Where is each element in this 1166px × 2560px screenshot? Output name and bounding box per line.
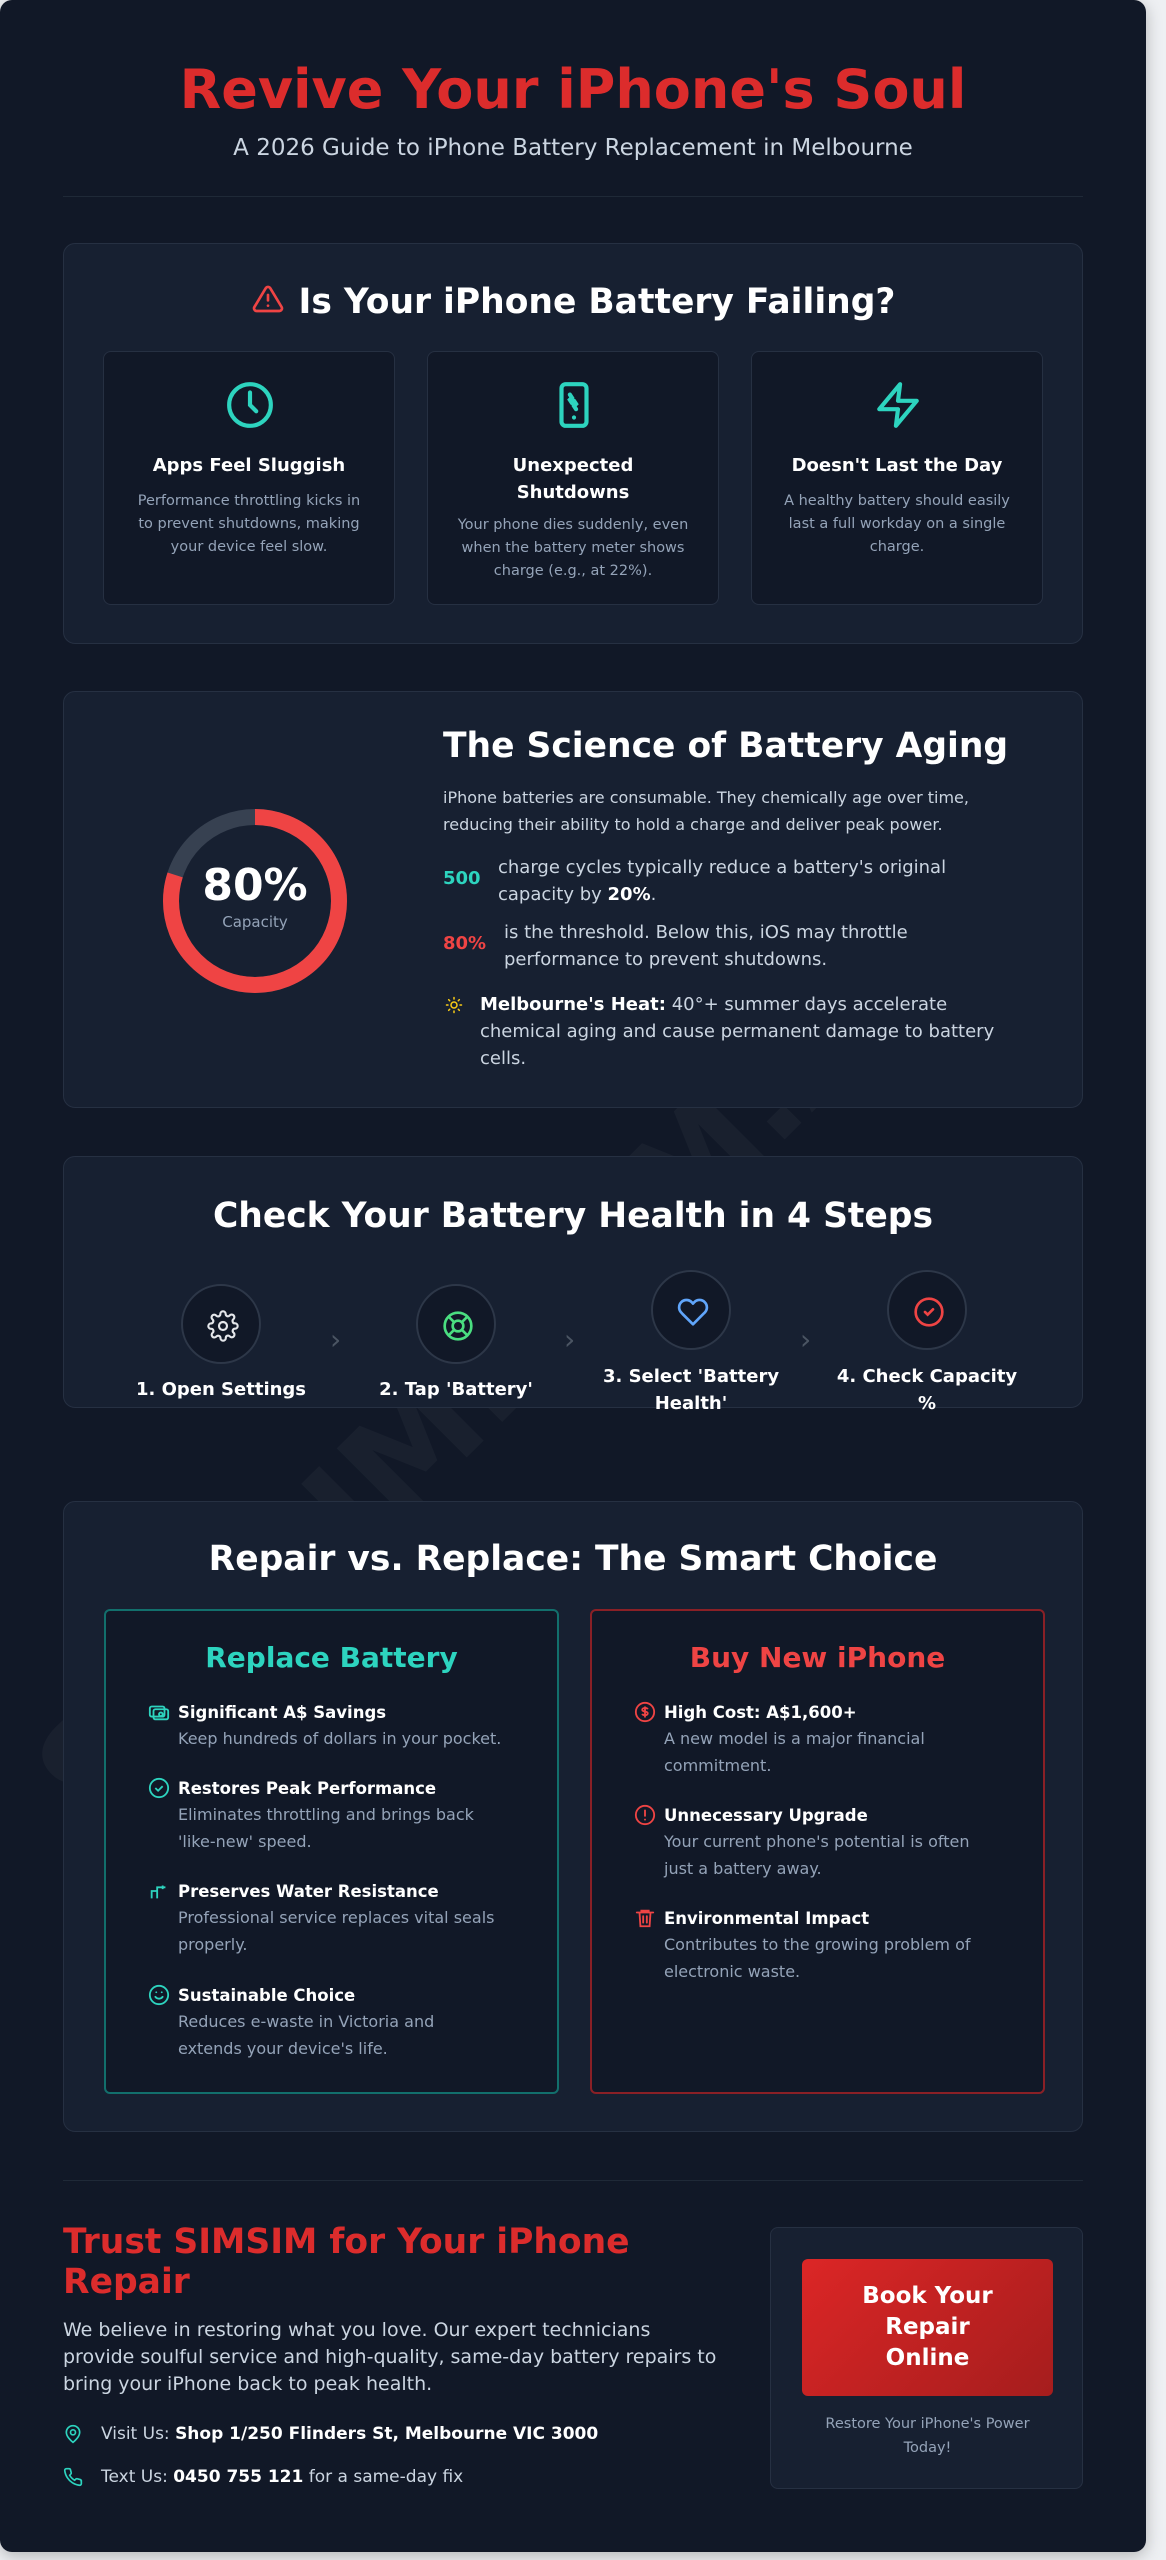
heading: steps: Check Your Battery Health in 4 Steps (213, 1196, 933, 1236)
item: upgrade: Your current phone's potential is often just a battery away. (664, 1832, 969, 1878)
ring chart: Capacity (222, 913, 288, 931)
panel: failing signs (63, 243, 1083, 644)
stat: 80%: 80% (443, 933, 486, 954)
text: trust: bring your iPhone back to peak health. (63, 2373, 432, 2395)
stat: 500: 500 (443, 868, 481, 889)
icon: sun (446, 996, 462, 1014)
heading: science: The Science of Battery Aging (443, 726, 1008, 766)
arrow: › (330, 1323, 341, 1356)
button: book: Repair (885, 2314, 970, 2340)
item: water: Professional service replaces vital seals properly. (178, 1908, 494, 1954)
heading: trust: Trust SIMSIM for Your iPhone Repair (63, 2222, 630, 2302)
item: performance (148, 1778, 474, 1851)
card: sluggish: Performance throttling kicks in to prevent shutdowns, making your device feel slow. (138, 493, 360, 555)
card: sluggish: Apps Feel Sluggish (153, 455, 345, 476)
item: water: Preserves Water Resistance (178, 1882, 439, 1901)
icon: phone (559, 382, 589, 428)
item: savings: Keep hundreds of dollars in your pocket. (178, 1729, 501, 1748)
box: replace battery: Replace Battery (205, 1641, 458, 1674)
card: shutdowns (427, 351, 719, 605)
heat note: Melbourne's Heat: 40°+ summer days accelerate chemical aging and cause permanent damage to battery cells. (480, 994, 994, 1069)
card: shutdowns: Shutdowns (517, 482, 629, 503)
card: day: Doesn't Last the Day (792, 455, 1002, 476)
section: trust (63, 2222, 716, 2487)
item: cost: A new model is a major financial commitment. (664, 1729, 925, 1775)
heading: failing: Is Your iPhone Battery Failing? (299, 282, 895, 322)
item: environment (636, 1909, 971, 1981)
text: trust (63, 2319, 716, 2395)
stat: 80%: is the threshold. Below this, iOS may throttle performance to prevent shutdowns. (504, 922, 908, 970)
text: trust: We believe in restoring what you love. Our expert technicians (63, 2319, 650, 2341)
item: environment: Contributes to the growing problem of electronic waste. (664, 1935, 971, 1981)
button: book: Online (886, 2345, 969, 2371)
step 4 (837, 1270, 1017, 1414)
item: upgrade (634, 1804, 969, 1878)
step 4: 4. Check Capacity (837, 1366, 1017, 1387)
title: Revive Your iPhone's Soul (180, 58, 966, 121)
box: buy new: Buy New iPhone (690, 1641, 945, 1674)
box: replace battery (104, 1609, 559, 2094)
card: shutdowns: Unexpected (513, 455, 633, 476)
card: day (751, 351, 1043, 605)
card: sluggish (103, 351, 395, 605)
box: buy new (590, 1609, 1045, 2094)
item: water (150, 1882, 494, 1954)
step 3: 3. Select 'Battery (603, 1366, 779, 1387)
item: performance: Eliminates throttling and brings back 'like-new' speed. (178, 1805, 474, 1851)
text: trust: provide soulful service and high-quality, same-day battery repairs to (63, 2346, 716, 2368)
card: day: A healthy battery should easily last a full workday on a single charge. (784, 493, 1010, 555)
arrow: › (800, 1323, 811, 1356)
ring chart (163, 809, 347, 993)
icon: clock (227, 382, 273, 428)
item: sustainable: Reduces e-waste in Victoria and extends your device's life. (178, 2012, 434, 2058)
item: sustainable: Sustainable Choice (178, 1986, 355, 2005)
text: intro: iPhone batteries are consumable. They chemically age over time, reducing their ability to hold a charge and deliver peak power. (443, 788, 969, 834)
CTA box (770, 2227, 1083, 2489)
item: savings (148, 1703, 501, 1748)
stat: 500: charge cycles typically reduce a battery's original capacity by 20%. (498, 857, 946, 905)
arrow: › (564, 1323, 575, 1356)
item: savings: Significant A$ Savings (178, 1703, 386, 1722)
subtitle: A 2026 Guide to iPhone Battery Replacement in Melbourne (233, 135, 913, 161)
item: sustainable (148, 1984, 434, 2058)
step 2 (379, 1284, 533, 1400)
panel: steps (63, 1156, 1083, 1408)
contact: address: Visit Us: Shop 1/250 Flinders St, Melbourne VIC 3000 (101, 2424, 598, 2444)
contact: phone: Text Us: 0450 755 121 for a same-day fix (101, 2467, 463, 2487)
panel: repair vs replace (63, 1501, 1083, 2132)
step 1: 1. Open Settings (136, 1379, 306, 1400)
item: upgrade: Unnecessary Upgrade (664, 1806, 868, 1825)
text: cta: Restore Your iPhone's Power Today! (825, 2416, 1030, 2456)
item: cost (634, 1702, 925, 1775)
card: shutdowns: Your phone dies suddenly, even when the battery meter shows charge (e.g., at 22%). (458, 517, 688, 579)
item: environment: Environmental Impact (664, 1909, 869, 1928)
panel: steps: % (918, 1393, 936, 1414)
icon: bolt (877, 382, 919, 428)
step 1 (136, 1284, 306, 1400)
watermark: SIMSIM.COM.AU (6, 876, 982, 1853)
button: book (802, 2259, 1053, 2396)
panel: steps: Health' (655, 1393, 727, 1414)
step 3 (603, 1270, 779, 1414)
ring chart: 80% (202, 860, 308, 911)
item: cost: High Cost: A$1,600+ (664, 1703, 857, 1722)
item: performance: Restores Peak Performance (178, 1779, 436, 1798)
button: book: Book Your (862, 2283, 993, 2309)
heading: compare: Repair vs. Replace: The Smart Choice (209, 1539, 937, 1579)
panel: science (63, 691, 1083, 1108)
step 2: 2. Tap 'Battery' (379, 1379, 533, 1400)
